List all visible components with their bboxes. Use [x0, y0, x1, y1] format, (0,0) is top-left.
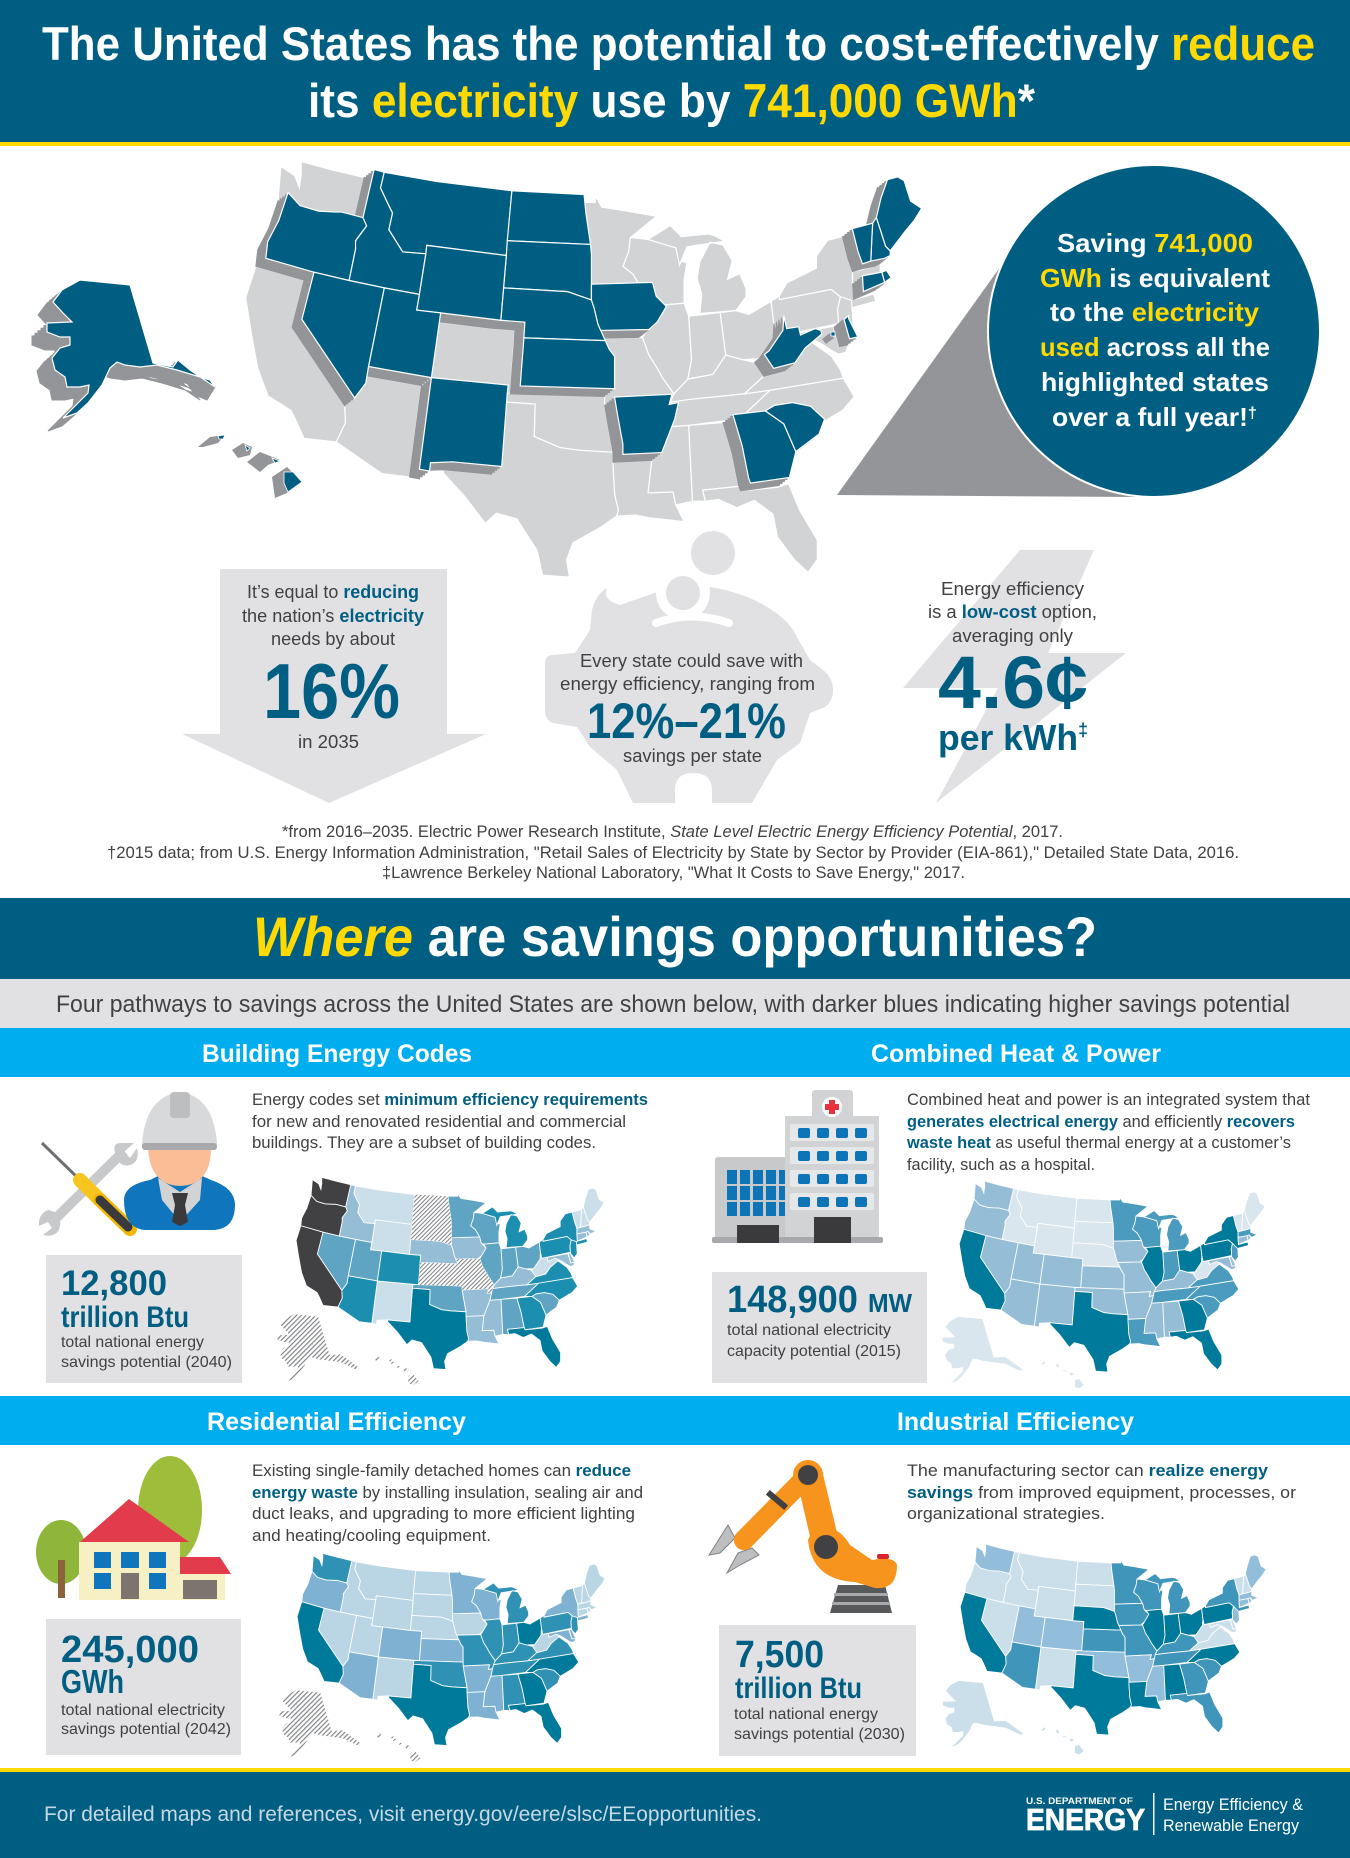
footnotes: †2015 data; from U.S. Energy Information Administration, "Retail Sales of Electricity by State by Sector by Provider (EIA-861)," Detailed State Data, 2016. — [107, 843, 1239, 862]
stat box: 12,800 trillion Btu: savings potential (2040) — [61, 1354, 232, 1371]
logo: U.S. Department of Energy: Energy Efficiency & — [1163, 1795, 1304, 1814]
subheading strip: Four pathways to savings across the United States are shown below, with darker blues indicating higher savings potential — [56, 991, 1290, 1018]
stat: lightning bolt 4.6¢: ‡ — [1078, 720, 1088, 740]
stat box: 148,900 MW: 148,900 MW — [727, 1279, 912, 1321]
text: combined heat and power description: waste heat as useful thermal energy at a customer’s — [906, 1133, 1291, 1152]
text: building energy codes description: for new and renovated residential and commercial — [252, 1112, 626, 1131]
stat: lightning bolt 4.6¢: per kWh — [938, 717, 1080, 758]
callout: cone from map to circle — [837, 263, 1136, 497]
text: residential efficiency description — [252, 1461, 643, 1545]
section band: bottom row: Residential Efficiency — [207, 1408, 466, 1436]
stat box: 7,500 trillion Btu: savings potential (2030) — [734, 1726, 905, 1743]
stat box: 12,800 trillion Btu: total national energy — [61, 1334, 204, 1351]
stat: piggy bank 12%–21%: Every state could save with — [580, 651, 803, 671]
stat box: 245,000 GWh — [46, 1619, 241, 1755]
stat box: 7,500 trillion Btu: total national energy — [734, 1706, 878, 1723]
stat box: 245,000 GWh: GWh — [61, 1663, 124, 1700]
text: combined heat and power description: facility, such as a hospital. — [907, 1155, 1095, 1174]
title banner — [0, 0, 1350, 146]
map: industrial efficiency — [943, 1544, 1266, 1755]
text: residential efficiency description: Existing single-family detached homes can reduce — [252, 1461, 631, 1480]
icon: house and trees — [36, 1456, 231, 1600]
heading: Where are savings opportunities?: Where are savings opportunities? — [253, 905, 1097, 968]
logo: U.S. Department of Energy: Renewable Energy — [1163, 1816, 1299, 1835]
text: combined heat and power description: generates electrical energy and efficiently recovers — [907, 1112, 1295, 1131]
stat: lightning bolt 4.6¢ — [903, 550, 1126, 803]
stat box: 12,800 trillion Btu — [46, 1255, 242, 1383]
title banner: The United States has the potential to cost-effectively reduce — [42, 17, 1315, 70]
stat: arrow 16%: It’s equal to reducing — [247, 582, 419, 602]
stat box: 148,900 MW: total national electricity — [727, 1322, 891, 1339]
stat: arrow 16%: 16% — [263, 647, 400, 735]
section band: top row — [0, 1028, 1350, 1077]
text: industrial efficiency description: The manufacturing sector can realize energy — [907, 1461, 1269, 1480]
section band: bottom row: Industrial Efficiency — [897, 1408, 1134, 1436]
stat box: 7,500 trillion Btu: 7,500 — [735, 1634, 824, 1676]
text: building energy codes description: buildings. They are a subset of building codes. — [252, 1133, 596, 1152]
footnotes: *from 2016–2035. Electric Power Research Institute, State Level Electric Energy Efficiency Potential, 2017. — [282, 822, 1063, 841]
footer — [0, 1768, 1350, 1858]
callout circle: GWh is equivalent — [1040, 263, 1270, 293]
stat: arrow 16%: the nation’s electricity — [242, 606, 424, 626]
icon: robot arm — [709, 1460, 897, 1613]
footer: For detailed maps and references, visit energy.gov/eere/slsc/EEopportunities. — [44, 1803, 762, 1826]
stat box: 12,800 trillion Btu: 12,800 — [61, 1264, 167, 1303]
text: building energy codes description: Energy codes set minimum efficiency requirements — [252, 1090, 648, 1109]
stat: lightning bolt 4.6¢: Energy efficiency — [941, 579, 1084, 599]
text: industrial efficiency description: organizational strategies. — [907, 1504, 1105, 1523]
icon: hospital — [712, 1090, 883, 1243]
map: combined heat and power — [942, 1181, 1265, 1389]
callout circle: to the electricity — [1050, 297, 1260, 327]
stat box: 245,000 GWh: 245,000 — [61, 1629, 199, 1671]
map: contiguous United States with highlighted states — [246, 162, 922, 577]
title banner: its electricity use by 741,000 GWh* — [308, 74, 1036, 127]
stat: lightning bolt 4.6¢: averaging only — [952, 626, 1073, 646]
stat box: 7,500 trillion Btu — [719, 1625, 916, 1756]
stat: piggy bank 12%–21%: energy efficiency, ranging from — [560, 674, 815, 694]
map: building energy codes — [278, 1177, 604, 1385]
text: industrial efficiency description — [907, 1461, 1296, 1523]
stat: arrow 16% — [182, 569, 486, 803]
callout circle: Saving 741,000 — [1057, 228, 1253, 258]
logo: U.S. Department of Energy: U.S. DEPARTMENT OF — [1026, 1796, 1133, 1807]
stat: arrow 16%: needs by about — [271, 629, 395, 649]
callout circle: over a full year! — [1052, 402, 1244, 432]
footnotes: ‡Lawrence Berkeley National Laboratory, "What It Costs to Save Energy," 2017. — [382, 863, 965, 882]
callout circle — [988, 165, 1320, 497]
callout circle: † — [1248, 405, 1257, 422]
stat: lightning bolt 4.6¢: is a low-cost option, — [928, 602, 1097, 622]
stat: arrow 16%: in 2035 — [298, 732, 359, 752]
stat: piggy bank 12%–21%: 12%–21% — [587, 693, 786, 749]
logo: U.S. Department of Energy — [1026, 1793, 1304, 1837]
stat box: 245,000 GWh: total national electricity — [61, 1702, 225, 1719]
stat: lightning bolt 4.6¢: 4.6¢ — [938, 641, 1088, 724]
text: industrial efficiency description: savings from improved equipment, processes, or — [907, 1483, 1296, 1502]
text: combined heat and power description: Combined heat and power is an integrated system that — [907, 1090, 1310, 1109]
stat: piggy bank 12%–21%: savings per state — [623, 746, 762, 766]
heading: Where are savings opportunities? — [0, 898, 1350, 979]
stat: piggy bank 12%–21% — [545, 531, 833, 803]
stat box: 148,900 MW — [712, 1272, 927, 1383]
section band: bottom row — [0, 1396, 1350, 1445]
map: Alaska and Hawaii highlighted — [32, 280, 302, 498]
section band: top row: Combined Heat & Power — [871, 1040, 1161, 1068]
callout circle: used across all the — [1040, 332, 1270, 362]
stat box: 245,000 GWh: savings potential (2042) — [61, 1721, 231, 1738]
stat box: 12,800 trillion Btu: trillion Btu — [61, 1301, 189, 1334]
text: combined heat and power description — [906, 1090, 1310, 1174]
text: building energy codes description — [252, 1090, 648, 1152]
callout circle: highlighted states — [1041, 367, 1269, 397]
stat box: 7,500 trillion Btu: trillion Btu — [735, 1672, 862, 1705]
text: residential efficiency description: energy waste by installing insulation, sealing air and — [252, 1483, 643, 1502]
subheading strip — [0, 979, 1350, 1028]
footnotes — [107, 822, 1239, 882]
logo: U.S. Department of Energy: ENERGY — [1026, 1802, 1145, 1837]
text: residential efficiency description: and heating/cooling equipment. — [252, 1526, 491, 1545]
text: residential efficiency description: duct leaks, and upgrading to more efficient lighting — [252, 1504, 635, 1523]
map: residential efficiency — [280, 1553, 605, 1762]
stat box: 148,900 MW: capacity potential (2015) — [727, 1343, 901, 1360]
icon: engineer with tools — [39, 1092, 235, 1236]
section band: top row: Building Energy Codes — [202, 1040, 472, 1068]
map: Washington DC highlight — [822, 332, 835, 344]
